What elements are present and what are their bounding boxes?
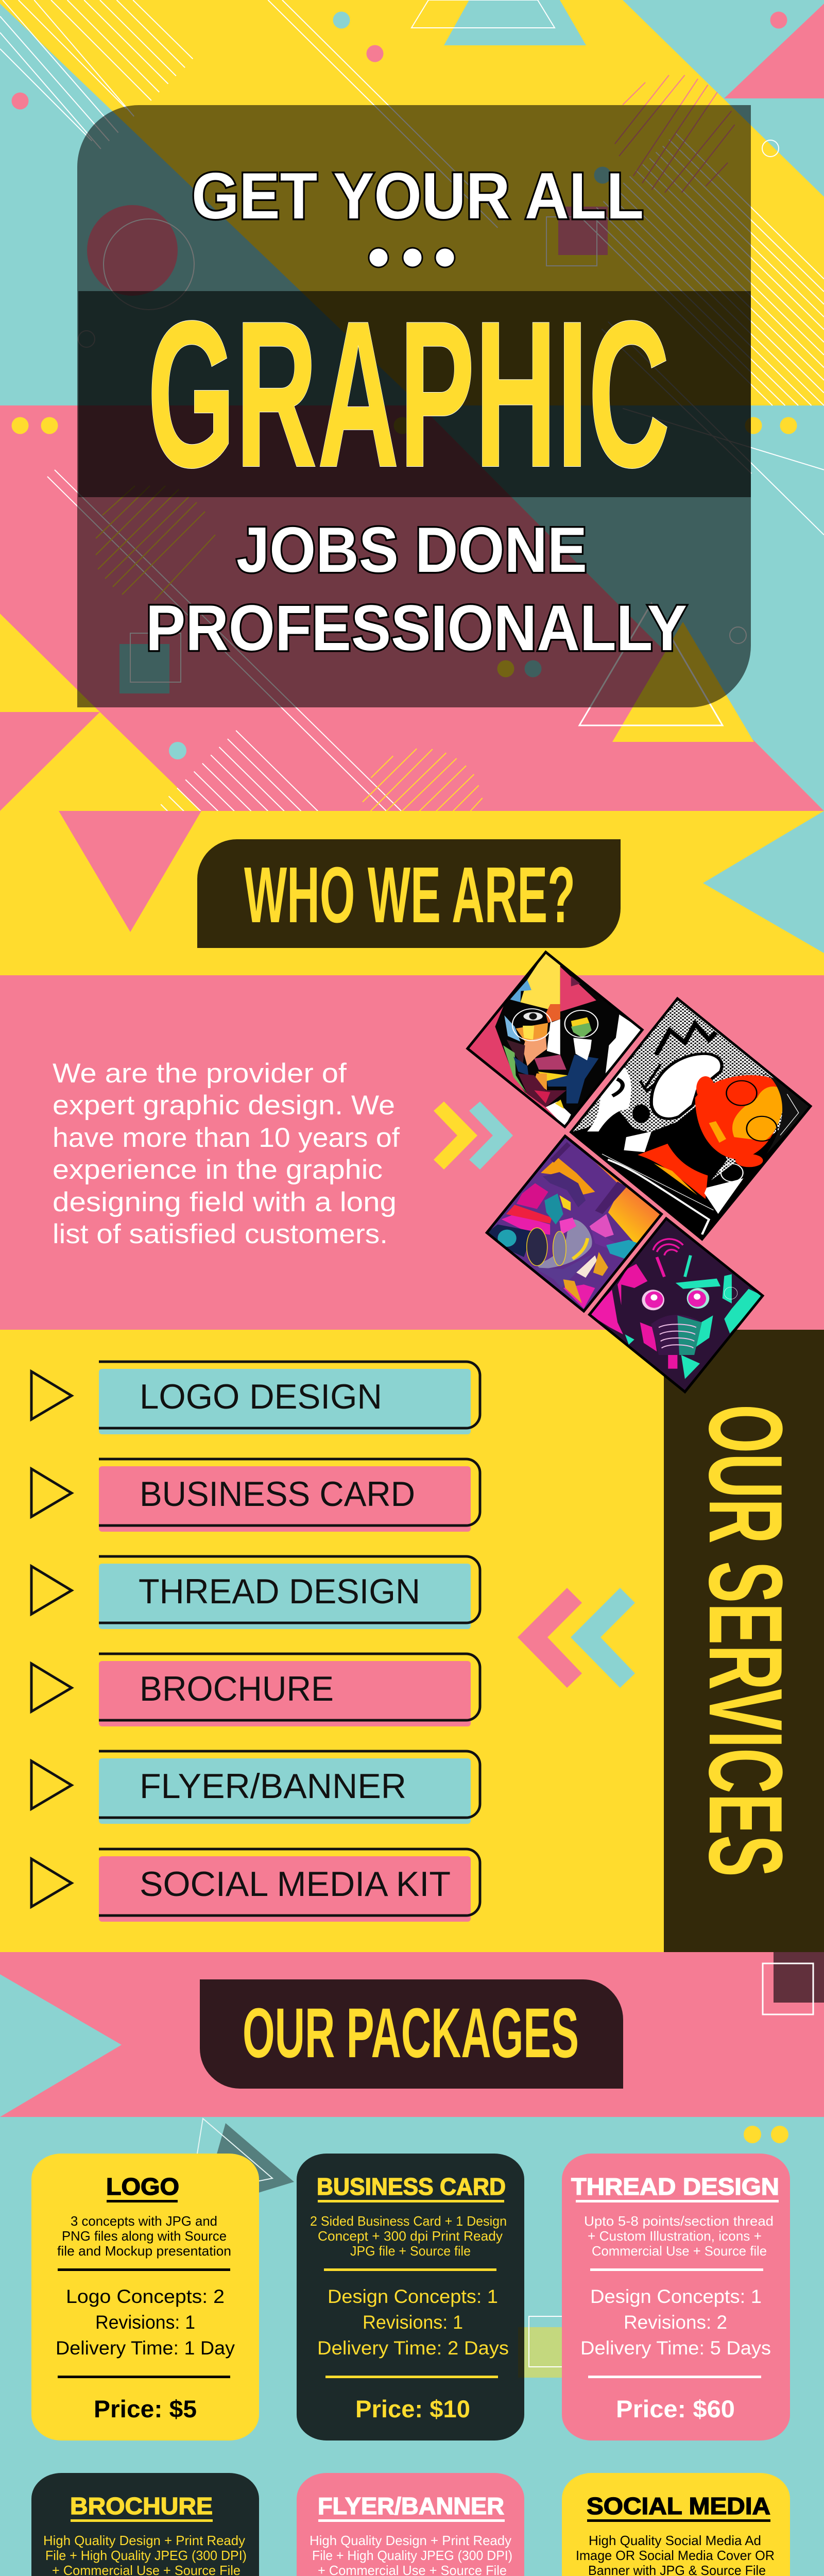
text block: about: We are the provider of — [53, 1058, 347, 1089]
text block: about — [53, 1058, 400, 1249]
card: logo: PNG files along with Source — [62, 2228, 227, 2244]
service row: brochure — [31, 1654, 480, 1726]
card: flyer banner: FLYER/BANNER — [318, 2493, 504, 2519]
service row: business card — [31, 1459, 480, 1532]
card: logo: 3 concepts with JPG and — [71, 2213, 217, 2229]
artwork: cyclist and space mask — [485, 1135, 764, 1394]
service row: flyer banner: FLYER/BANNER — [140, 1767, 406, 1806]
card: business card: Design Concepts: 1 — [328, 2286, 498, 2307]
card: logo: Revisions: 1 — [95, 2312, 195, 2333]
panel: who we are — [0, 975, 824, 1330]
services dark column — [664, 1330, 824, 1952]
card: logo — [31, 2154, 259, 2441]
card: brochure: High Quality Design + Print Ready — [43, 2533, 245, 2548]
card: social media: Image OR Social Media Cover OR — [576, 2548, 775, 2563]
hero dark panel — [77, 105, 751, 707]
card: business card: Price: $10 — [355, 2395, 470, 2422]
card: logo: Logo Concepts: 2 — [66, 2286, 225, 2307]
card: logo: file and Mockup presentation — [57, 2243, 231, 2259]
card: brochure: BROCHURE — [70, 2493, 213, 2519]
heading: professionally: PROFESSIONALLY — [146, 592, 687, 664]
card: flyer banner: File + High Quality JPEG (300 DPI) — [312, 2548, 512, 2563]
card: thread design: Delivery Time: 5 Days — [580, 2337, 771, 2359]
card: thread design — [562, 2154, 790, 2441]
heading: jobs done: JOBS DONE — [236, 515, 587, 586]
artwork: pop art portrait — [465, 950, 645, 1128]
artwork: comic portrait — [569, 997, 812, 1240]
card: brochure: File + High Quality JPEG (300 DPI) — [45, 2548, 247, 2563]
card: business card: Delivery Time: 2 Days — [317, 2337, 509, 2359]
service row: business card: BUSINESS CARD — [140, 1475, 415, 1514]
card: business card: Concept + 300 dpi Print Ready — [318, 2228, 503, 2244]
packages pink background — [0, 1952, 824, 2117]
card: social media: SOCIAL MEDIA — [587, 2493, 770, 2519]
text block: about: list of satisfied customers. — [53, 1219, 388, 1249]
card: thread design: THREAD DESIGN — [571, 2173, 779, 2200]
card: thread design: Upto 5-8 points/section thread — [584, 2213, 774, 2229]
card: thread design: Design Concepts: 1 — [590, 2286, 762, 2307]
card: business card: Revisions: 1 — [363, 2312, 463, 2333]
packages teal background — [0, 2117, 824, 2576]
service row: logo design: LOGO DESIGN — [140, 1377, 382, 1416]
service row: social media kit: SOCIAL MEDIA KIT — [140, 1865, 451, 1904]
card: brochure — [31, 2473, 259, 2576]
three dots — [369, 248, 455, 267]
service row: thread design — [31, 1556, 480, 1629]
card: business card — [297, 2154, 524, 2441]
card: logo: Price: $5 — [94, 2395, 197, 2422]
service row: social media kit — [31, 1849, 480, 1922]
hero dark band — [78, 291, 751, 497]
card: social media: High Quality Social Media Ad — [589, 2533, 761, 2548]
artwork outline 4 — [590, 1218, 763, 1392]
heading: our services: OUR SERVICES — [687, 1404, 804, 1877]
card: business card: JPG file + Source file — [350, 2243, 471, 2259]
card: business card: BUSINESS CARD — [317, 2173, 506, 2200]
card: thread design: Commercial Use + Source file — [592, 2243, 767, 2259]
service row: logo design — [31, 1362, 480, 1434]
artwork: cyclist illustration — [485, 1135, 664, 1312]
artwork outline 2 — [571, 998, 811, 1239]
card: thread design: + Custom Illustration, icons + — [588, 2228, 762, 2244]
artwork outline 3 — [487, 1136, 662, 1311]
services yellow background — [0, 1330, 664, 1952]
card: thread design: Price: $60 — [616, 2395, 735, 2422]
card: logo: LOGO — [106, 2173, 179, 2200]
service row: flyer banner — [31, 1751, 480, 1824]
text block: about: expert graphic design. We — [53, 1090, 395, 1121]
text block: about: experience in the graphic — [53, 1155, 383, 1185]
card: flyer banner — [297, 2473, 524, 2576]
artwork: space mask illustration — [588, 1217, 764, 1394]
heading: our packages: OUR PACKAGES — [243, 1994, 579, 2073]
artwork outline 1 — [468, 952, 642, 1127]
artwork: pop art and comic portraits — [465, 950, 812, 1240]
card: business card: 2 Sided Business Card + 1 Design — [310, 2213, 507, 2229]
who we are background — [0, 811, 824, 975]
card: logo: Delivery Time: 1 Day — [56, 2337, 235, 2359]
card: social media — [562, 2473, 790, 2576]
icon: double chevron left — [518, 1588, 635, 1688]
icon: double chevron right — [434, 1101, 513, 1170]
service row: brochure: BROCHURE — [140, 1669, 334, 1708]
heading: get your all: GET YOUR ALL — [192, 159, 644, 232]
service row: thread design: THREAD DESIGN — [139, 1572, 420, 1611]
who we are heading box — [197, 839, 621, 948]
hero background — [0, 0, 824, 811]
text block: about: have more than 10 years of — [53, 1123, 400, 1153]
packages heading box — [200, 1979, 623, 2089]
card: thread design: Revisions: 2 — [624, 2312, 727, 2333]
card: flyer banner: High Quality Design + Print Ready — [310, 2533, 511, 2548]
text block: about: designing field with a long — [53, 1187, 397, 1217]
heading: who we are: WHO WE ARE? — [244, 851, 575, 939]
